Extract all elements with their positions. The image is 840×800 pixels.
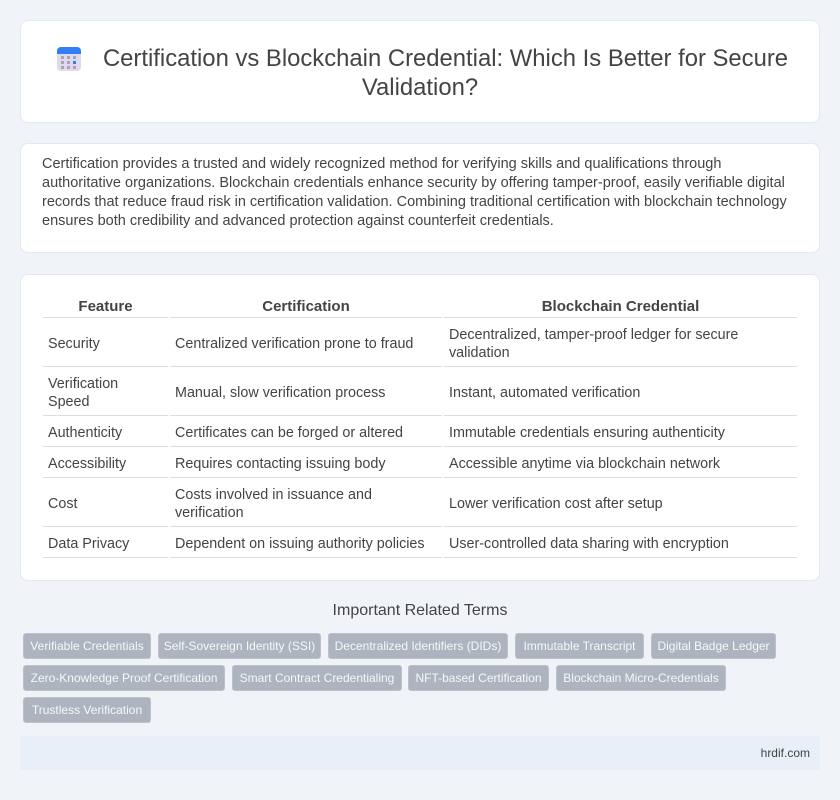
related term tags: Digital Badge Ledger	[657, 639, 770, 653]
intro text	[42, 156, 787, 229]
table header: Feature	[78, 298, 133, 315]
related term tags: Zero-Knowledge Proof Certification	[31, 671, 217, 685]
panel: comparison table: Lower verification cost after setup	[449, 496, 663, 512]
intro text: records that reduce fraud risk in certification validation. Combining traditional certification with blockchain technology	[42, 194, 787, 210]
row: verification speed: Verification	[48, 376, 118, 392]
intro text: authoritative organizations. Blockchain credentials enhance security by offering tamper-proof, easily verifiable digital	[42, 175, 785, 191]
panel: comparison table: validation	[449, 345, 510, 361]
related term tags	[23, 633, 776, 723]
related term tags: Trustless Verification	[32, 703, 142, 717]
panel: comparison table: Certificates can be forged or altered	[175, 425, 403, 441]
intro text: ensures both credibility and advanced protection against counterfeit credentials.	[42, 213, 554, 229]
panel: comparison table: Manual, slow verification process	[175, 385, 385, 401]
panel: comparison table: verification	[175, 505, 244, 521]
related term tags: NFT-based Certification	[415, 671, 542, 685]
heading: related terms: Important Related Terms	[333, 602, 507, 619]
related term tags: Verifiable Credentials	[30, 639, 144, 653]
row: data privacy: Data Privacy	[48, 536, 129, 552]
panel: comparison table: Decentralized, tamper-proof ledger for secure	[449, 327, 738, 343]
row: authenticity: Authenticity	[48, 425, 122, 441]
related term tags: Smart Contract Credentialing	[240, 671, 394, 685]
panel: introduction	[20, 143, 820, 253]
footer source: hrdif.com	[761, 746, 810, 760]
icon: calendar	[57, 47, 81, 71]
panel: comparison table: Accessible anytime via blockchain network	[449, 456, 720, 472]
footer bar	[20, 736, 820, 770]
row: accessibility: Accessibility	[48, 456, 126, 472]
panel: comparison table: Centralized verification prone to fraud	[175, 336, 413, 352]
related term tags: Decentralized Identifiers (DIDs)	[335, 639, 501, 653]
related term tags: Immutable Transcript	[523, 639, 636, 653]
row: verification speed: Speed	[48, 394, 89, 410]
related term tags: Self-Sovereign Identity (SSI)	[164, 639, 315, 653]
panel: comparison table: Requires contacting issuing body	[175, 456, 386, 472]
row: security: Security	[48, 336, 100, 352]
panel: comparison table: Blockchain Credential	[542, 298, 699, 315]
title	[103, 45, 788, 101]
panel: comparison table: Certification	[262, 298, 350, 315]
panel: comparison table: User-controlled data sharing with encryption	[449, 536, 729, 552]
header card	[20, 20, 820, 123]
panel: comparison table: Dependent on issuing authority policies	[175, 536, 425, 552]
panel: comparison table: Costs involved in issuance and	[175, 487, 372, 503]
title: Certification vs Blockchain Credential: Which Is Better for Secure	[103, 45, 788, 72]
intro text: Certification provides a trusted and widely recognized method for verifying skills and qualifications through	[42, 156, 721, 172]
row: cost: Cost	[48, 496, 78, 512]
panel: comparison table: Immutable credentials ensuring authenticity	[449, 425, 725, 441]
panel: comparison table	[20, 274, 820, 581]
panel: comparison table: Instant, automated verification	[449, 385, 640, 401]
related term tags: Blockchain Micro-Credentials	[563, 671, 719, 685]
row: verification speed	[48, 376, 118, 410]
title: Validation?	[362, 74, 478, 101]
